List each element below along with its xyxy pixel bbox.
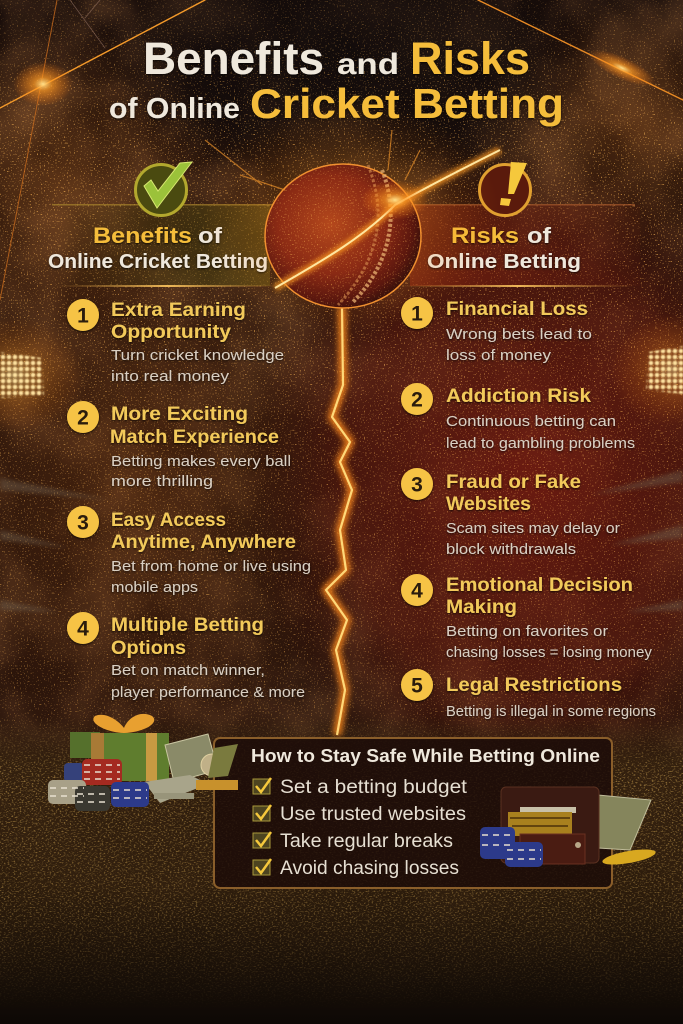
benefit 3: Bet from home or live using	[111, 558, 311, 575]
risk 4: Emotional Decision	[446, 575, 633, 596]
title: Benefits	[143, 33, 324, 84]
risks column heading: Online Betting	[427, 251, 581, 273]
risk 4: Making	[446, 597, 517, 618]
illustration: wallet, cash and chips	[480, 787, 657, 868]
icon: check badge	[136, 162, 192, 216]
risks header band	[400, 204, 640, 287]
illustration: gift, cash and chips	[48, 714, 238, 811]
safety heading: How to Stay Safe While Betting Online	[251, 746, 600, 766]
benefit 1: into real money	[111, 368, 230, 385]
benefit 4	[67, 612, 305, 701]
benefit 2: Match Experience	[110, 427, 279, 448]
title: of Online	[109, 93, 240, 125]
safety item 1: Set a betting budget	[280, 777, 468, 798]
benefit 1: Opportunity	[111, 322, 231, 343]
benefit 3: mobile apps	[111, 579, 198, 596]
benefit 2: More Exciting	[111, 404, 248, 425]
safety item 3: Take regular breaks	[280, 831, 453, 852]
risk 4: chasing losses = losing money	[446, 644, 652, 661]
risk 1: Wrong bets lead to	[446, 326, 592, 343]
cash	[598, 795, 651, 850]
stadium light right	[610, 314, 683, 426]
flare streaks	[0, 0, 683, 300]
chips	[480, 827, 543, 867]
risk 1: 1	[411, 302, 423, 326]
benefit 1: Extra Earning	[111, 300, 246, 321]
risk 1: Financial Loss	[446, 299, 588, 320]
title: Cricket Betting	[250, 80, 564, 127]
risk 4	[401, 574, 652, 661]
benefit 2: 2	[77, 406, 89, 430]
risk 5: Legal Restrictions	[446, 675, 622, 696]
risks column heading: Risks	[451, 223, 519, 248]
benefits header band	[52, 204, 280, 287]
risk 3: Fraud or Fake	[446, 472, 581, 493]
wallet	[501, 787, 599, 864]
benefits column heading	[48, 223, 268, 273]
benefits column heading: Benefits	[93, 223, 192, 248]
benefit 4: Options	[111, 638, 186, 659]
benefits list	[67, 299, 311, 701]
risk 5	[401, 669, 656, 720]
risk 1	[401, 297, 592, 364]
benefits column heading: of	[198, 223, 223, 248]
risk 3: 3	[411, 474, 423, 496]
benefit 3	[67, 506, 311, 596]
risk 1: loss of money	[446, 347, 552, 364]
stadium stands	[0, 470, 683, 612]
title: Risks	[410, 33, 530, 84]
benefit 1: Turn cricket knowledge	[111, 347, 284, 364]
risks list	[401, 297, 656, 720]
safety item 4: Avoid chasing losses	[280, 858, 459, 879]
benefit 1: 1	[77, 304, 89, 328]
risk 3: Scam sites may delay or	[446, 520, 620, 537]
coins	[601, 846, 657, 868]
safety panel	[214, 738, 612, 888]
benefit 4: 4	[77, 618, 89, 640]
risk 2: 2	[411, 388, 423, 412]
stadium light left	[0, 317, 84, 433]
benefit 4: Bet on match winner,	[111, 662, 265, 679]
ground	[0, 715, 683, 1024]
icon: exclamation badge	[480, 162, 530, 216]
risk 2: lead to gambling problems	[446, 435, 635, 452]
risk 3: Websites	[446, 494, 531, 515]
title	[109, 33, 564, 127]
risk 4: Betting on favorites or	[446, 623, 608, 640]
risk 2	[401, 383, 635, 452]
benefit 3: Easy Access	[111, 510, 226, 531]
benefit 4: Multiple Betting	[111, 615, 264, 636]
risk 2: Addiction Risk	[446, 386, 591, 407]
risk 5: 5	[411, 674, 423, 698]
risks column heading	[427, 223, 581, 273]
benefit 2	[67, 401, 291, 490]
chips	[48, 759, 149, 811]
risk 3	[401, 468, 620, 558]
risk 3: block withdrawals	[446, 541, 576, 558]
benefits column heading: Online Cricket Betting	[48, 251, 268, 273]
cricket ball	[204, 111, 504, 316]
safety item 2: Use trusted websites	[280, 804, 466, 825]
title: and	[337, 48, 399, 81]
benefit 1	[67, 299, 284, 385]
lightning crack	[326, 307, 352, 735]
risks column heading: of	[527, 223, 552, 248]
risk 4: 4	[411, 580, 423, 602]
benefit 3: Anytime, Anywhere	[111, 532, 296, 553]
benefit 2: Betting makes every ball	[111, 453, 291, 470]
benefit 4: player performance & more	[111, 684, 305, 701]
benefit 2: more thrilling	[111, 473, 213, 490]
cash	[144, 734, 238, 803]
benefit 3: 3	[77, 512, 89, 534]
risk 2: Continuous betting can	[446, 413, 616, 430]
risk 5: Betting is illegal in some regions	[446, 703, 656, 720]
gift box	[70, 714, 169, 781]
